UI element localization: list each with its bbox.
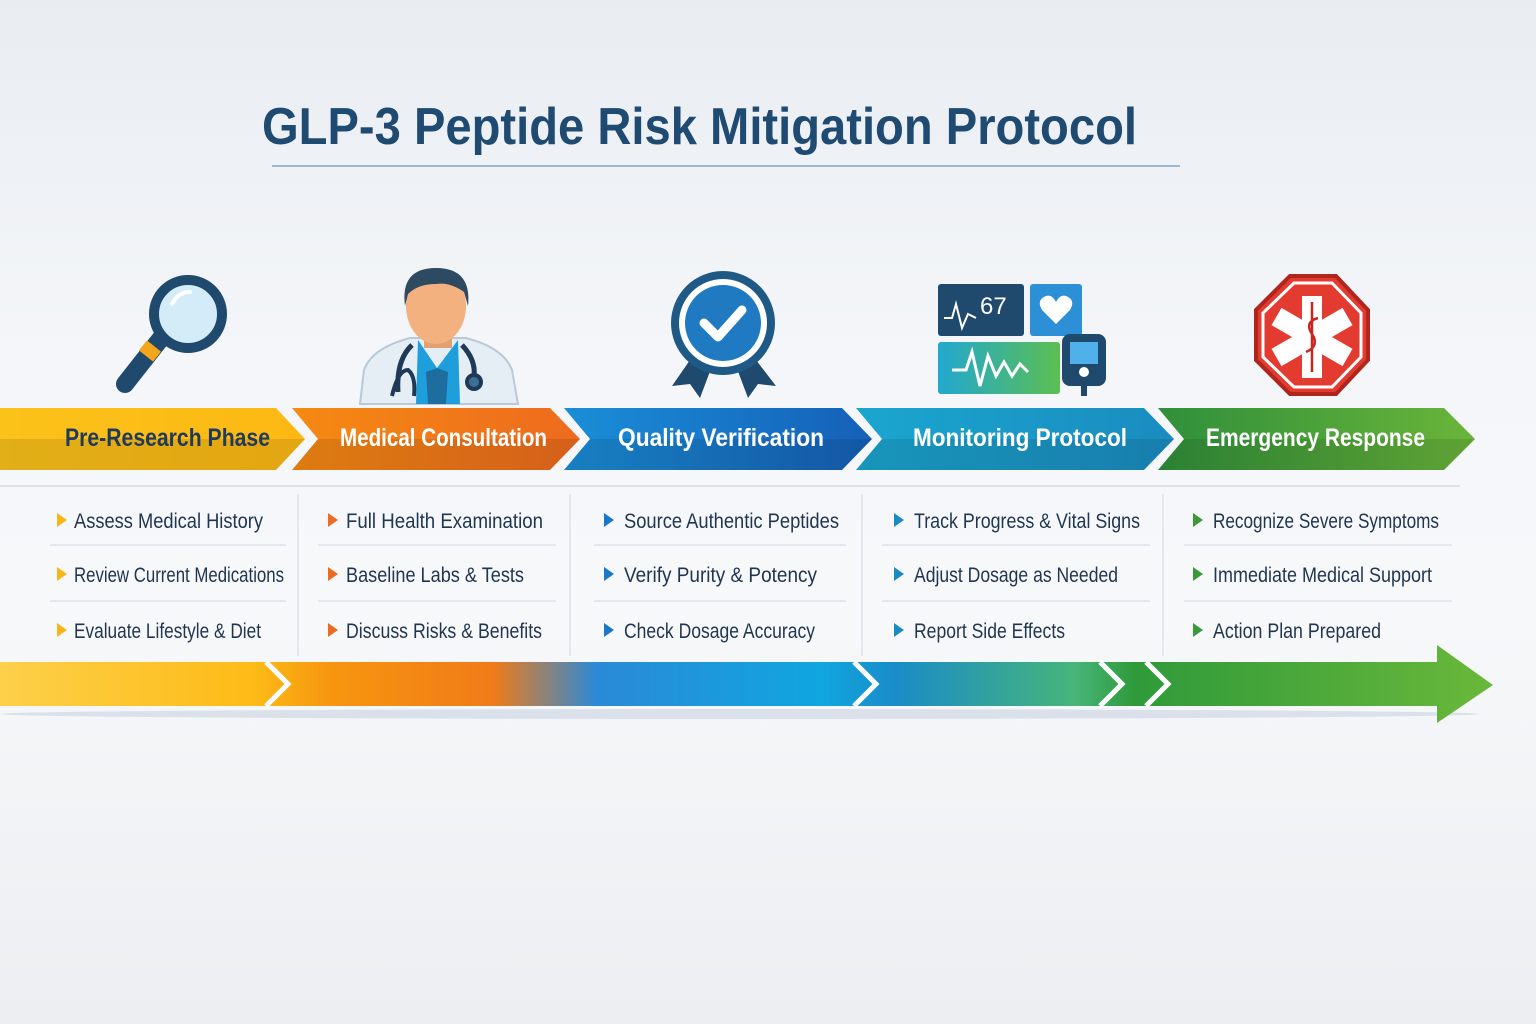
chevron: Monitoring Protocol xyxy=(856,408,1174,470)
list: quality verification: Source Authentic Peptides xyxy=(624,510,839,533)
chevron: Medical Consultation: Medical Consultation xyxy=(340,424,547,452)
list: pre-research: Assess Medical History xyxy=(74,510,263,533)
chevron: Medical Consultation xyxy=(292,408,580,470)
chevron: Emergency Response xyxy=(1158,408,1475,470)
icon: doctor xyxy=(360,268,518,404)
icon: monitoring devices: 67 xyxy=(980,293,1007,320)
title: GLP-3 Peptide Risk Mitigation Protocol xyxy=(262,98,1137,156)
list: emergency: Action Plan Prepared xyxy=(1213,620,1381,643)
list: medical consultation: Full Health Examination xyxy=(346,510,543,533)
list: emergency: Recognize Severe Symptoms xyxy=(1213,510,1439,533)
list: quality verification: Check Dosage Accuracy xyxy=(624,620,815,643)
list: emergency: Immediate Medical Support xyxy=(1213,564,1432,587)
arrow: progress bar xyxy=(0,645,1493,723)
list: medical consultation: Discuss Risks & Benefits xyxy=(346,620,542,643)
list: medical consultation xyxy=(328,510,543,643)
chevron: Pre-Research Phase: Pre-Research Phase xyxy=(65,424,270,452)
list: pre-research: Evaluate Lifestyle & Diet xyxy=(74,620,261,643)
list: monitoring: Adjust Dosage as Needed xyxy=(914,564,1118,587)
list: quality verification: Verify Purity & Potency xyxy=(624,564,817,587)
chevron: Pre-Research Phase xyxy=(0,408,305,470)
chevron: Quality Verification: Quality Verification xyxy=(618,424,824,452)
icon: emergency star of life xyxy=(1256,276,1368,394)
chevron: Quality Verification xyxy=(564,408,872,470)
list: emergency xyxy=(1193,510,1439,643)
icon: quality badge xyxy=(671,271,776,398)
list: monitoring xyxy=(894,510,1140,643)
list: medical consultation: Baseline Labs & Tests xyxy=(346,564,524,587)
icon: monitoring devices xyxy=(938,284,1106,396)
icon: magnifying glass xyxy=(125,280,222,384)
list: monitoring: Track Progress & Vital Signs xyxy=(914,510,1140,533)
list: pre-research xyxy=(57,510,284,643)
list: monitoring: Report Side Effects xyxy=(914,620,1065,643)
chevron: Emergency Response: Emergency Response xyxy=(1206,424,1425,452)
list: pre-research: Review Current Medications xyxy=(74,564,284,587)
chevron: Monitoring Protocol: Monitoring Protocol xyxy=(913,424,1127,452)
list: quality verification xyxy=(604,510,839,643)
banner: chevrons xyxy=(0,408,1475,470)
